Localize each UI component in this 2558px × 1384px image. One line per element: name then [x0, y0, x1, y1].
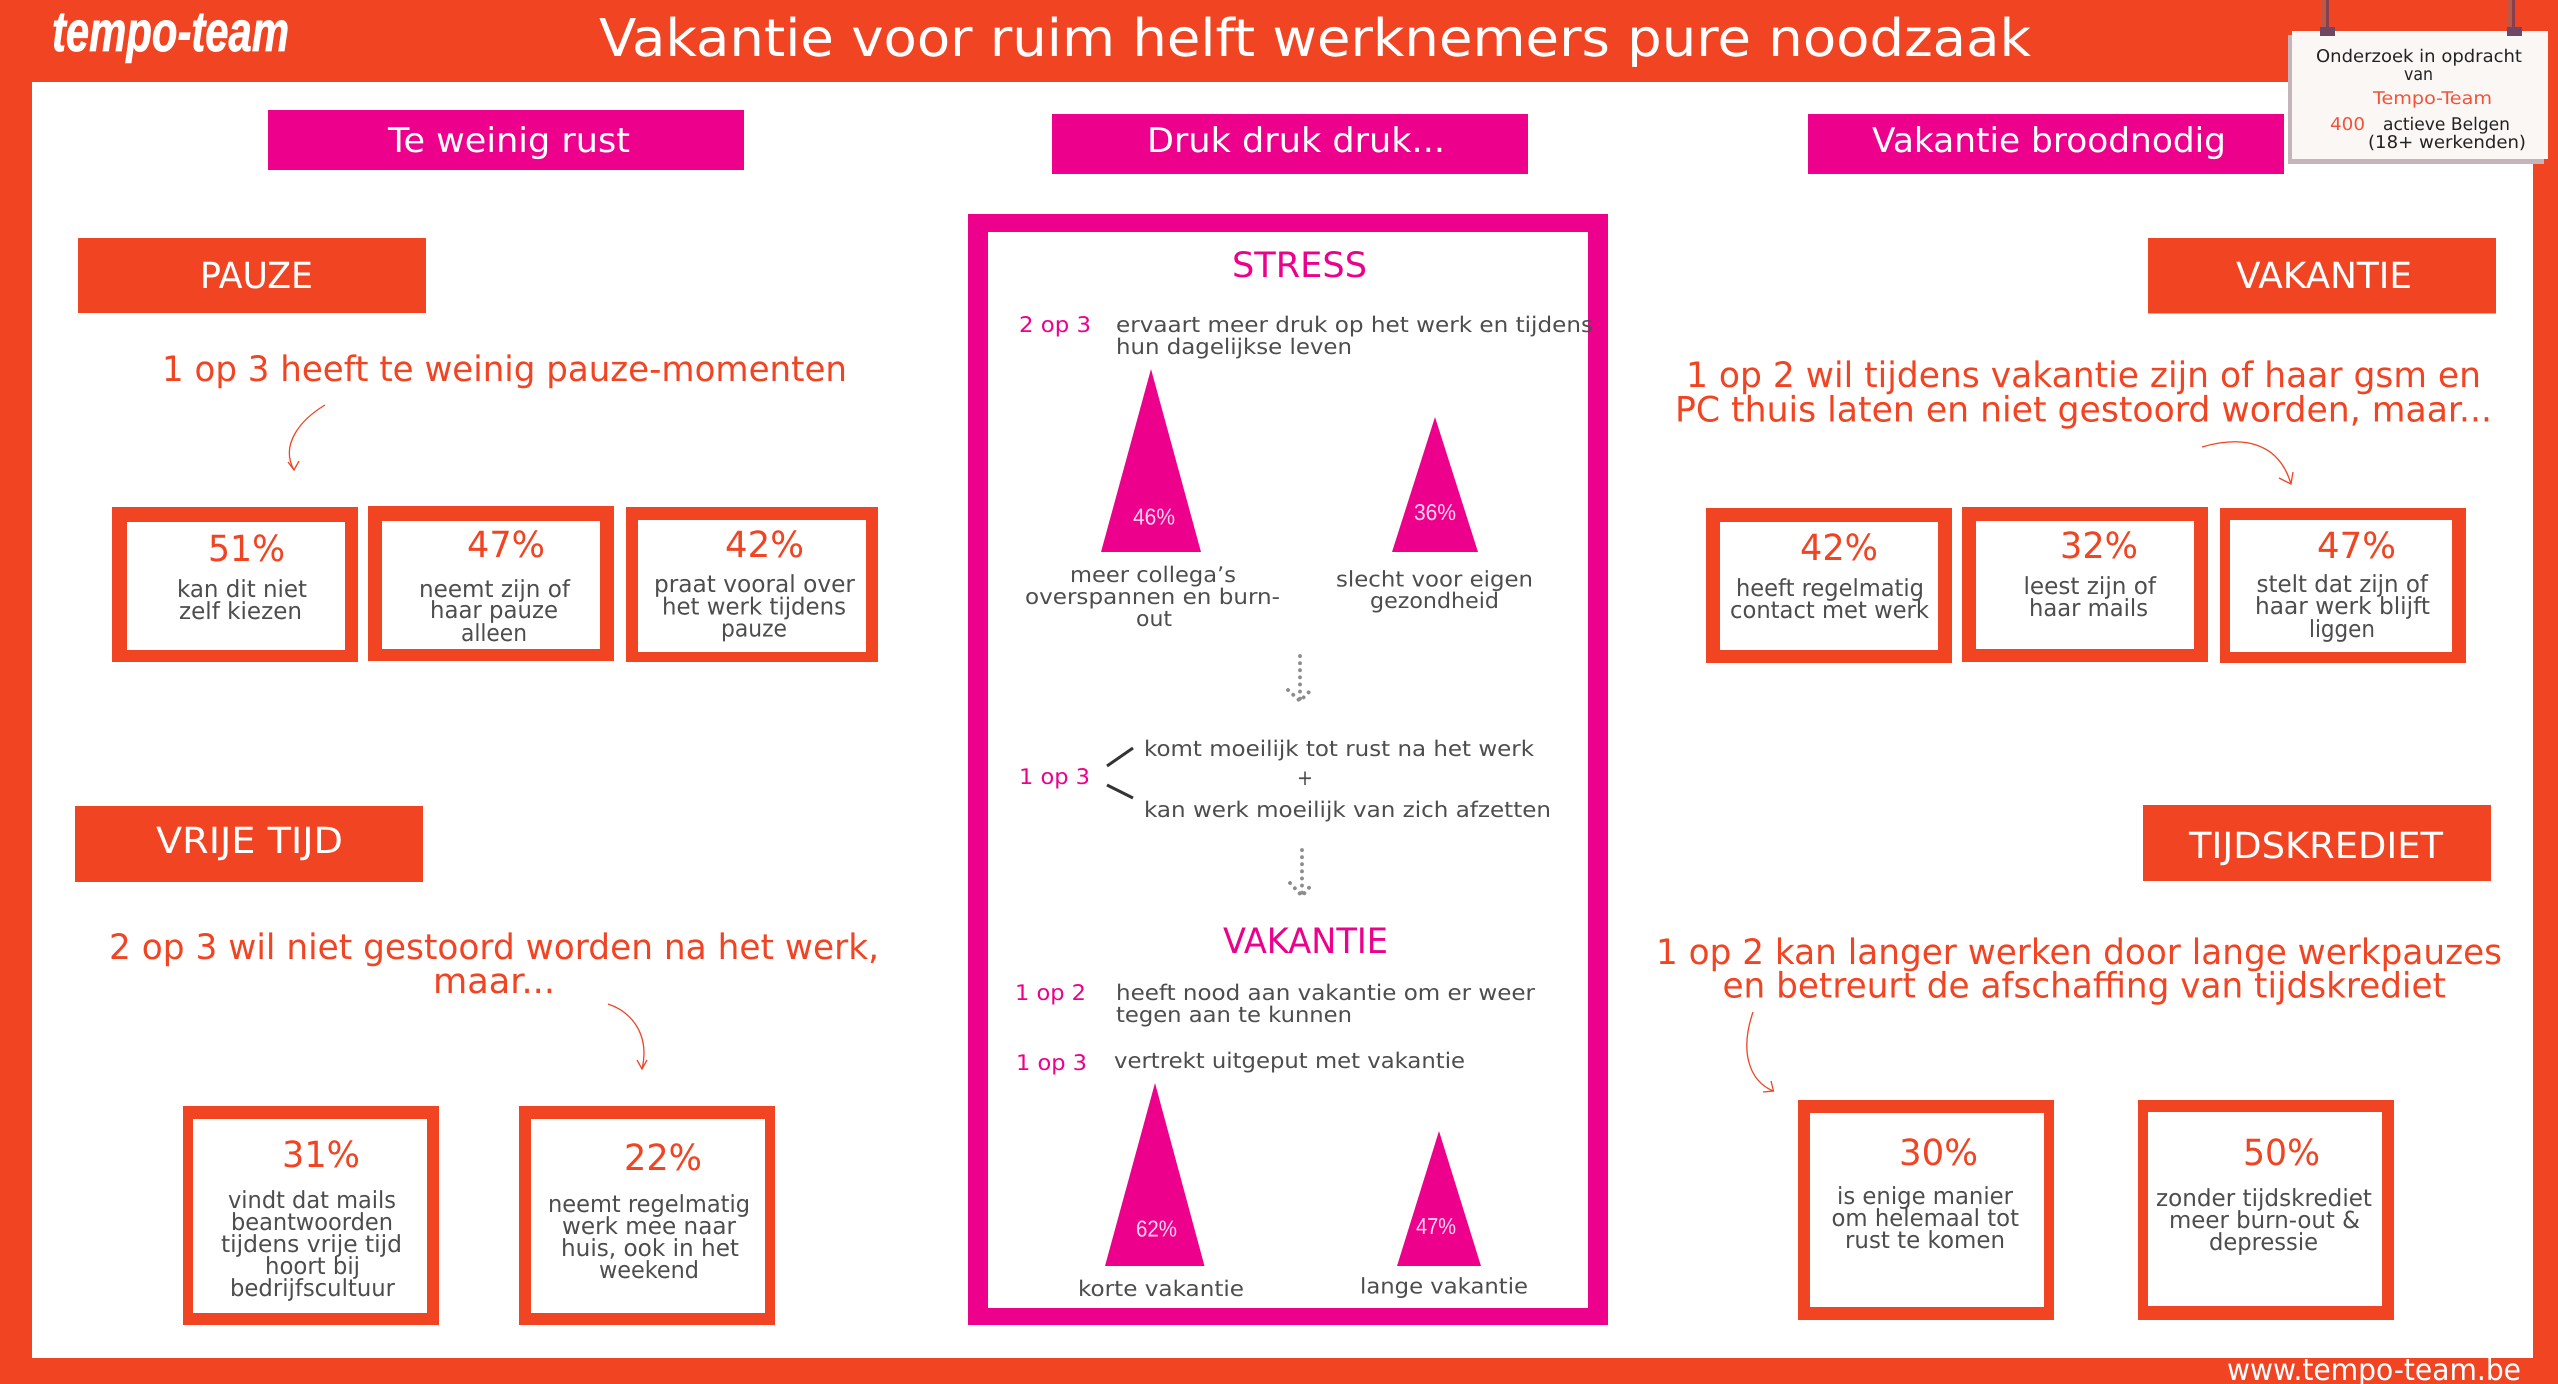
card: 22%: werk mee naar [562, 1212, 736, 1240]
section label: VRIJE TIJD: VRIJE TIJD [156, 821, 343, 862]
card: 31% [183, 1106, 439, 1325]
text: slecht voor eigen gezondheid: gezondheid [1370, 589, 1499, 614]
card: 31%: hoort bij [265, 1252, 360, 1280]
text: meer collega's: meer collega’s [1070, 563, 1236, 588]
heading: Te weinig rust [268, 110, 744, 170]
card: 51%: 51% [208, 529, 285, 570]
card: 50%: depressie [2209, 1228, 2318, 1256]
chart: triangle 46% [1101, 369, 1201, 552]
card: 50%: 50% [2243, 1133, 2320, 1174]
card: 22% [519, 1106, 775, 1325]
text: vakantie statement [1675, 356, 2492, 431]
text: meer collega's [1025, 563, 1280, 632]
card: 30% [1798, 1100, 2054, 1320]
card: 42% [1706, 508, 1952, 663]
panel: left column Te weinig rust [75, 110, 879, 1325]
text: tijdskrediet statement: en betreurt de afschaffing van tijdskrediet [1722, 967, 2446, 1007]
text: vakantie statement: 1 op 2 wil tijdens vakantie zijn of haar gsm en [1686, 356, 2481, 396]
card: 47%: stelt dat zijn of [2256, 570, 2429, 598]
text: 1 op 3 rust [1019, 737, 1551, 823]
text: 1 op 3 rust: komt moeilijk tot rust na het werk [1144, 737, 1535, 762]
panel: right column Vakantie broodnodig [1656, 114, 2502, 1320]
chart: triangle 47% [1397, 1131, 1481, 1266]
card: 31%: tijdens vrije tijd [221, 1230, 402, 1258]
card: 47%: 47% [2317, 526, 2396, 567]
card: 31%: beantwoorden [231, 1208, 393, 1236]
card: 42%: contact met werk [1730, 596, 1929, 624]
card: 42%: heeft regelmatig [1736, 574, 1924, 602]
callout: hanging note Onderzoek: (18+ werkenden) [2368, 133, 2526, 153]
text: vrije tijd statement: maar... [433, 962, 555, 1002]
text: slecht voor eigen gezondheid: slecht voor eigen [1336, 568, 1533, 592]
card: 42%: het werk tijdens [662, 592, 846, 620]
card: 22%: weekend [599, 1256, 699, 1284]
card: 50%: meer burn-out & [2169, 1206, 2360, 1234]
card: 51%: zelf kiezen [179, 597, 302, 625]
callout: hanging note Onderzoek: 400 [2330, 115, 2365, 135]
card: 47%: neemt zijn of [419, 575, 571, 603]
section label: TIJDSKREDIET: TIJDSKREDIET [2188, 826, 2444, 867]
arrow: pauze [288, 405, 325, 470]
text: 2 op 3 druk: 2 op 3 [1019, 313, 1091, 338]
callout: hanging note Onderzoek: Tempo-Team [2372, 89, 2492, 109]
arrow: dotted down 1 [1288, 656, 1311, 701]
card: 31%: bedrijfscultuur [230, 1274, 395, 1302]
text: 2 op 3 druk: ervaart meer druk op het werk en tijdens [1116, 313, 1593, 338]
text: lange vakantie: lange vakantie [1360, 1274, 1528, 1300]
card: 32%: leest zijn of [2024, 572, 2157, 600]
arrow: tijdskrediet [1747, 1012, 1774, 1092]
card: 22%: 22% [624, 1138, 702, 1179]
logo: tempo-team: tempo-team [52, 0, 289, 64]
section label: PAUZE: PAUZE [200, 256, 313, 297]
text: 1 op 2 vakantie [1015, 981, 1535, 1028]
card: 30%: om helemaal tot [1832, 1204, 2019, 1232]
callout: hanging note Onderzoek: actieve Belgen [2383, 115, 2510, 135]
section label: PAUZE [78, 238, 426, 313]
text: tijdskrediet statement [1656, 933, 2502, 1007]
text: 1 op 2 vakantie: tegen aan te kunnen [1116, 1003, 1352, 1028]
callout: hanging note Onderzoek: van [2404, 65, 2433, 85]
card: 31%: vindt dat mails [228, 1186, 396, 1214]
text: 1 op 3 rust: kan werk moeilijk van zich afzetten [1144, 798, 1551, 823]
text: 2 op 3 druk [1019, 313, 1593, 360]
text: pauze statement: 1 op 3 heeft te weinig pauze-momenten [162, 350, 847, 390]
card: 47%: liggen [2309, 615, 2375, 643]
card: 47% [2220, 508, 2466, 663]
chart: triangle 46%: 46% [1133, 504, 1175, 530]
text: 1 op 2 vakantie: 1 op 2 [1015, 981, 1086, 1006]
heading: Te weinig rust: Te weinig rust [387, 121, 630, 161]
chart: triangle 47%: 47% [1416, 1213, 1456, 1239]
text: 1 op 2 vakantie: heeft nood aan vakantie om er weer [1116, 981, 1535, 1006]
card: 47%: 47% [467, 525, 545, 566]
card: 42%: praat vooral over [654, 570, 855, 598]
card: 47%: haar pauze [430, 596, 558, 624]
callout: hanging note Onderzoek [2288, 0, 2548, 164]
chart: triangle 36%: 36% [1414, 499, 1456, 525]
section label: VAKANTIE [2148, 238, 2496, 314]
card: 30%: is enige manier [1837, 1182, 2013, 1210]
text: meer collega's: overspannen en burn- [1025, 585, 1280, 610]
arrow: vakantie [2202, 442, 2293, 484]
card: 30%: 30% [1899, 1133, 1978, 1174]
card: 50%: zonder tijdskrediet [2156, 1184, 2372, 1212]
chart: triangle 62% [1105, 1083, 1204, 1266]
card: 22%: huis, ook in het [561, 1234, 739, 1262]
card: 30%: rust te komen [1845, 1226, 2005, 1254]
card: 47%: alleen [461, 619, 527, 647]
card: 32%: haar mails [2029, 594, 2148, 622]
text: vrije tijd statement [109, 928, 879, 1002]
text: korte vakantie: korte vakantie [1078, 1277, 1244, 1302]
card: 32% [1962, 507, 2208, 662]
text: 1 op 3 uitgeput: vertrekt uitgeput met vakantie [1114, 1049, 1465, 1074]
text: tijdskrediet statement: 1 op 2 kan langer werken door lange werkpauzes [1656, 933, 2502, 973]
heading: Vakantie broodnodig [1808, 114, 2284, 174]
card: 32%: 32% [2060, 526, 2138, 567]
chart: triangle 36% [1392, 417, 1478, 552]
card: 50% [2138, 1100, 2394, 1320]
card: 51%: kan dit niet [177, 575, 307, 603]
callout: hanging note Onderzoek: Onderzoek in opdracht [2316, 47, 2522, 67]
heading: Druk druk druk: Druk druk druk... [1147, 121, 1445, 161]
text: 1 op 3 rust: + [1297, 766, 1313, 791]
card: 31%: 31% [282, 1135, 360, 1176]
arrow: vrije tijd [608, 1004, 647, 1069]
panel: center column Druk druk druk [968, 114, 1608, 1325]
panel: pink frame [968, 214, 1608, 1325]
chart: triangle 62%: 62% [1136, 1216, 1177, 1242]
section label: TIJDSKREDIET [2143, 805, 2491, 881]
text: vakantie statement: PC thuis laten en niet gestoord worden, maar... [1675, 391, 2492, 431]
card: 51% [112, 507, 358, 662]
text: slecht voor eigen gezondheid [1336, 568, 1533, 614]
text: 1 op 3 uitgeput: 1 op 3 [1016, 1051, 1087, 1076]
card: 22%: neemt regelmatig [548, 1190, 750, 1218]
heading: Druk druk druk [1052, 114, 1528, 174]
card: 42%: pauze [721, 614, 787, 642]
text: vrije tijd statement: 2 op 3 wil niet gestoord worden na het werk, [109, 928, 879, 968]
card: 42%: 42% [1800, 528, 1878, 569]
text: 1 op 3 rust: 1 op 3 [1019, 765, 1090, 790]
card: 42%: 42% [725, 525, 804, 566]
arrow: dotted down 2 [1290, 850, 1313, 896]
card: 47% [368, 506, 614, 661]
title: Vakantie voor ruim helft werknemers pure noodzaak [599, 9, 2031, 69]
text: 2 op 3 druk: hun dagelijkse leven [1116, 335, 1352, 360]
text: meer collega's: out [1136, 607, 1172, 632]
heading: STRESS: STRESS [1232, 246, 1367, 286]
card: 42% [626, 507, 878, 662]
heading: VAKANTIE: VAKANTIE [1223, 922, 1388, 962]
section label: VAKANTIE: VAKANTIE [2236, 256, 2412, 297]
card: 47%: haar werk blijft [2255, 592, 2430, 620]
heading: Vakantie broodnodig: Vakantie broodnodig [1872, 121, 2226, 161]
section label: VRIJE TIJD [75, 806, 423, 882]
text: 1 op 3 uitgeput [1016, 1049, 1465, 1076]
